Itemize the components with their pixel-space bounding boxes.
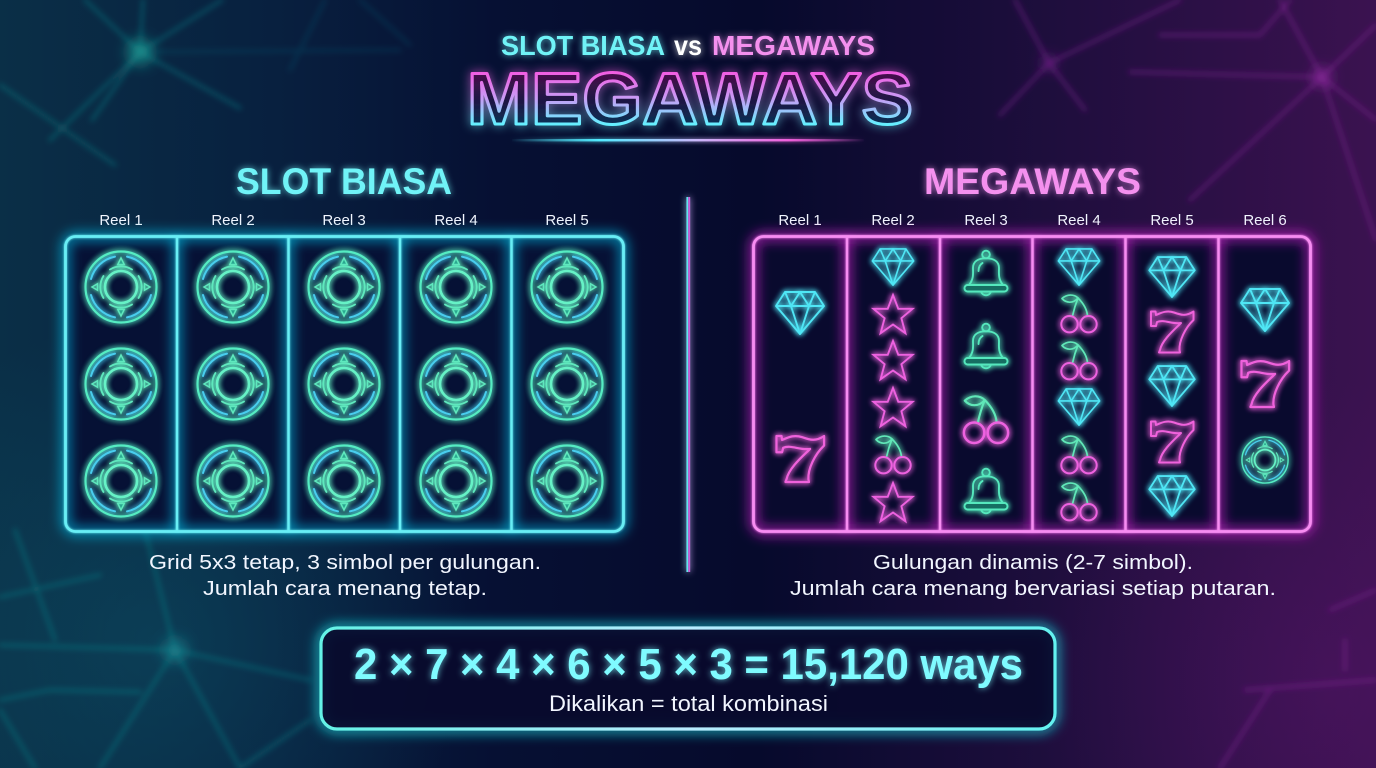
subtitle: slot biasa vs megaways: vs: [674, 30, 702, 61]
heading: megaways: MEGAWAYS: [924, 161, 1141, 202]
reel labels: Reel 6: [1243, 212, 1287, 229]
reel labels: Reel 4: [1057, 212, 1101, 229]
reel labels: Reel 1: [99, 212, 143, 229]
reel labels: [778, 212, 1287, 229]
callout: ways formula: [321, 628, 1055, 729]
reel 5 symbols: [1149, 257, 1195, 516]
subtitle: slot biasa vs megaways: MEGAWAYS: [712, 30, 875, 61]
title block: [467, 30, 913, 141]
reel grid frame: [754, 236, 1310, 532]
center divider: [686, 197, 690, 572]
reel grid frame: [66, 236, 624, 532]
heading: slot biasa: SLOT BIASA: [236, 161, 452, 202]
symbols: coins 5x3: [86, 252, 602, 516]
caption: megaways: [790, 551, 1276, 600]
subtitle: slot biasa vs megaways: SLOT BIASA: [501, 30, 665, 61]
caption: slot biasa: [149, 551, 541, 600]
reel 6 symbols: [1241, 289, 1289, 483]
caption: megaways: Gulungan dinamis (2-7 simbol).: [873, 551, 1193, 574]
reel 3 symbols: [964, 251, 1008, 513]
formula box: [321, 628, 1055, 729]
formula: 2 × 7 × 4 × 6 × 5 × 3 = 15,120 ways: [354, 640, 1023, 689]
reel 4 symbols: [1058, 249, 1100, 520]
formula caption: Dikalikan = total kombinasi: [549, 691, 828, 716]
subtitle: slot biasa vs megaways: [501, 30, 875, 61]
title underline: [512, 139, 864, 141]
panel: megaways: [754, 161, 1310, 600]
reel 2 symbols: [872, 249, 914, 521]
main title: megaways neon outline: MEGAWAYS: [467, 59, 913, 140]
caption: megaways: Jumlah cara menang bervariasi setiap putaran.: [790, 577, 1276, 600]
reel labels: Reel 5: [1150, 212, 1194, 229]
reel labels: Reel 1: [778, 212, 822, 229]
reel 1 symbols: [776, 292, 824, 482]
caption: slot biasa: Grid 5x3 tetap, 3 simbol per gulungan.: [149, 551, 541, 574]
reel labels: Reel 5: [545, 212, 589, 229]
reel labels: [99, 212, 589, 229]
panel: slot biasa: [66, 161, 624, 600]
reel labels: Reel 3: [322, 212, 366, 229]
caption: slot biasa: Jumlah cara menang tetap.: [203, 577, 487, 600]
reel labels: Reel 3: [964, 212, 1008, 229]
reel labels: Reel 4: [434, 212, 478, 229]
reel labels: Reel 2: [211, 212, 255, 229]
reel labels: Reel 2: [871, 212, 915, 229]
